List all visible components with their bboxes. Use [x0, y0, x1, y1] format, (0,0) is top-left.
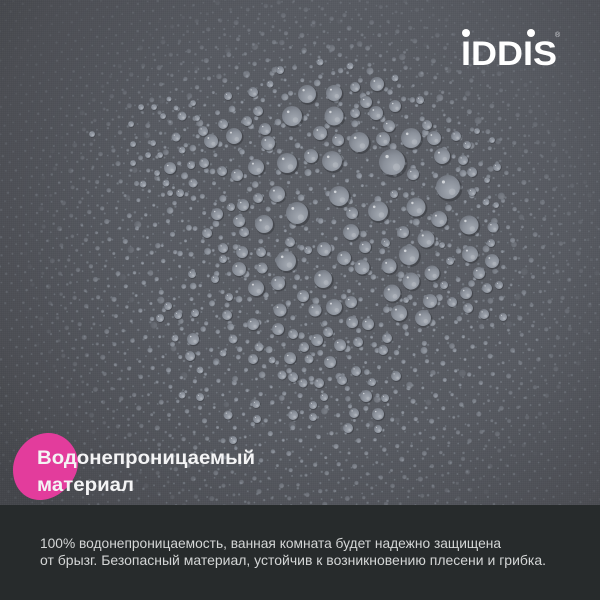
body text — [40, 536, 546, 568]
logo: IDDIS: ® — [555, 31, 561, 39]
heading: материал — [37, 475, 134, 496]
body text: 100% водонепроницаемость, ванная комната будет надежно защищена — [40, 536, 501, 551]
heading: Водонепроницаемый — [37, 448, 255, 469]
heading — [37, 448, 255, 496]
large water droplets — [89, 58, 508, 445]
body text: от брызг. Безопасный материал, устойчив к возникновению плесени и грибка. — [40, 553, 546, 568]
logo: IDDIS: IDDIS — [461, 35, 557, 73]
dark text band — [0, 505, 600, 600]
pink blob accent — [13, 433, 78, 500]
